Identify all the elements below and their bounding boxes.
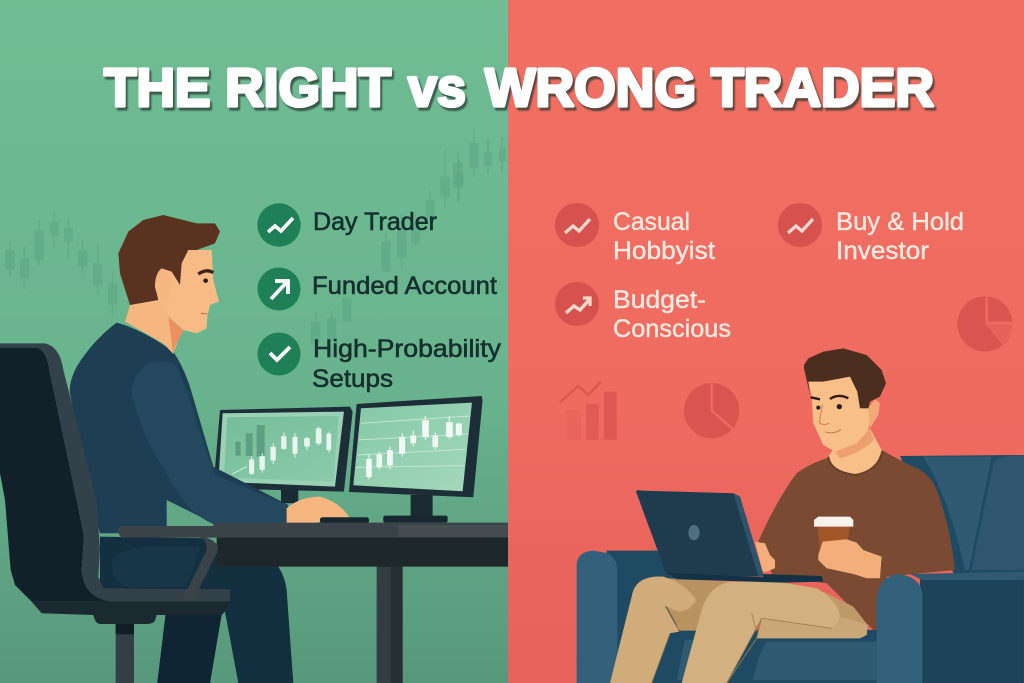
checklist: high-probability setups [258,332,502,393]
torso [70,323,288,533]
desk [213,523,508,683]
chair back and seat frame [0,343,230,683]
trousers [610,577,868,683]
facial features [811,396,848,433]
title: THE RIGHT [106,61,393,121]
neck [828,428,882,475]
ear [155,268,172,302]
trousers [100,537,293,683]
icon: faint pie chart [684,383,739,438]
hair [118,215,220,305]
icon: rising arrow [555,282,599,326]
illustration: casual trader on sofa [577,348,1024,683]
list: budget-conscious [555,282,731,343]
left sofa arm [577,551,617,683]
faint candlesticks top right [453,128,506,202]
icon: trend line [555,203,599,247]
sofa back [900,455,1024,580]
sweater [758,450,955,637]
title: THE RIGHT [104,58,391,118]
label: day trader: Day Trader [313,208,437,236]
title: vs [410,61,468,121]
list: casual hobbyist [555,203,715,265]
chin shadow [835,428,874,458]
icon: up arrow [258,268,300,310]
label: buy and hold investor: Buy & Hold [836,208,964,236]
label: budget-conscious: Conscious [613,315,731,343]
mouse [320,517,369,523]
icon: trend line [778,203,822,247]
label: funded account: Funded Account [312,272,497,300]
illustration: trader at desk [0,215,508,683]
icon: check mark [258,332,300,376]
faint candlestick background chart [5,150,464,343]
head: casual trader [804,348,886,475]
sofa right body [920,578,1024,683]
label: high-probability setups: High-Probability [313,335,502,363]
label: buy and hold investor: Investor [836,237,929,265]
face [808,377,870,452]
icon: faint bar chart [560,382,617,440]
hand on mouse [287,497,351,526]
title [104,58,936,121]
sofa dark base [607,551,677,683]
sofa right top [910,572,1024,580]
label: casual hobbyist: Casual [613,208,690,236]
icon: faint pie chart right [957,295,1015,352]
icon: trend line [257,203,301,247]
label: casual hobbyist: Hobbyist [613,237,715,265]
neck shadow [168,317,183,354]
hand holding cup [818,539,882,578]
monitors [213,396,483,523]
sweater collar [828,452,883,475]
head: left trader [118,215,220,354]
chair armrest [118,526,220,601]
checklist: day trader [257,203,437,247]
panel: wrong trader (red) [508,0,1024,683]
small cushion [677,640,697,680]
title: WRONG TRADER [485,58,934,118]
ear [868,399,880,428]
panel: right trader (green) [0,0,508,683]
hair [804,348,886,408]
sofa seat and arms [577,551,1024,683]
arm [132,361,287,526]
checklist: funded account [258,268,497,310]
face [150,250,219,333]
label: budget-conscious: Budget- [613,286,706,314]
facial features [198,271,213,314]
hand on laptop [755,542,775,572]
title: vs [408,58,466,118]
label: high-probability setups: Setups [312,365,393,393]
laptop [636,490,823,583]
coffee cup [814,517,853,550]
faint finance icons [560,295,1015,440]
neck [125,300,178,354]
seat cushion [753,642,877,680]
seat base [647,630,880,683]
green background [0,0,508,683]
red background [508,0,1024,683]
right sofa arm [877,574,922,683]
list: buy and hold investor [778,203,964,265]
title: WRONG TRADER [487,61,936,121]
